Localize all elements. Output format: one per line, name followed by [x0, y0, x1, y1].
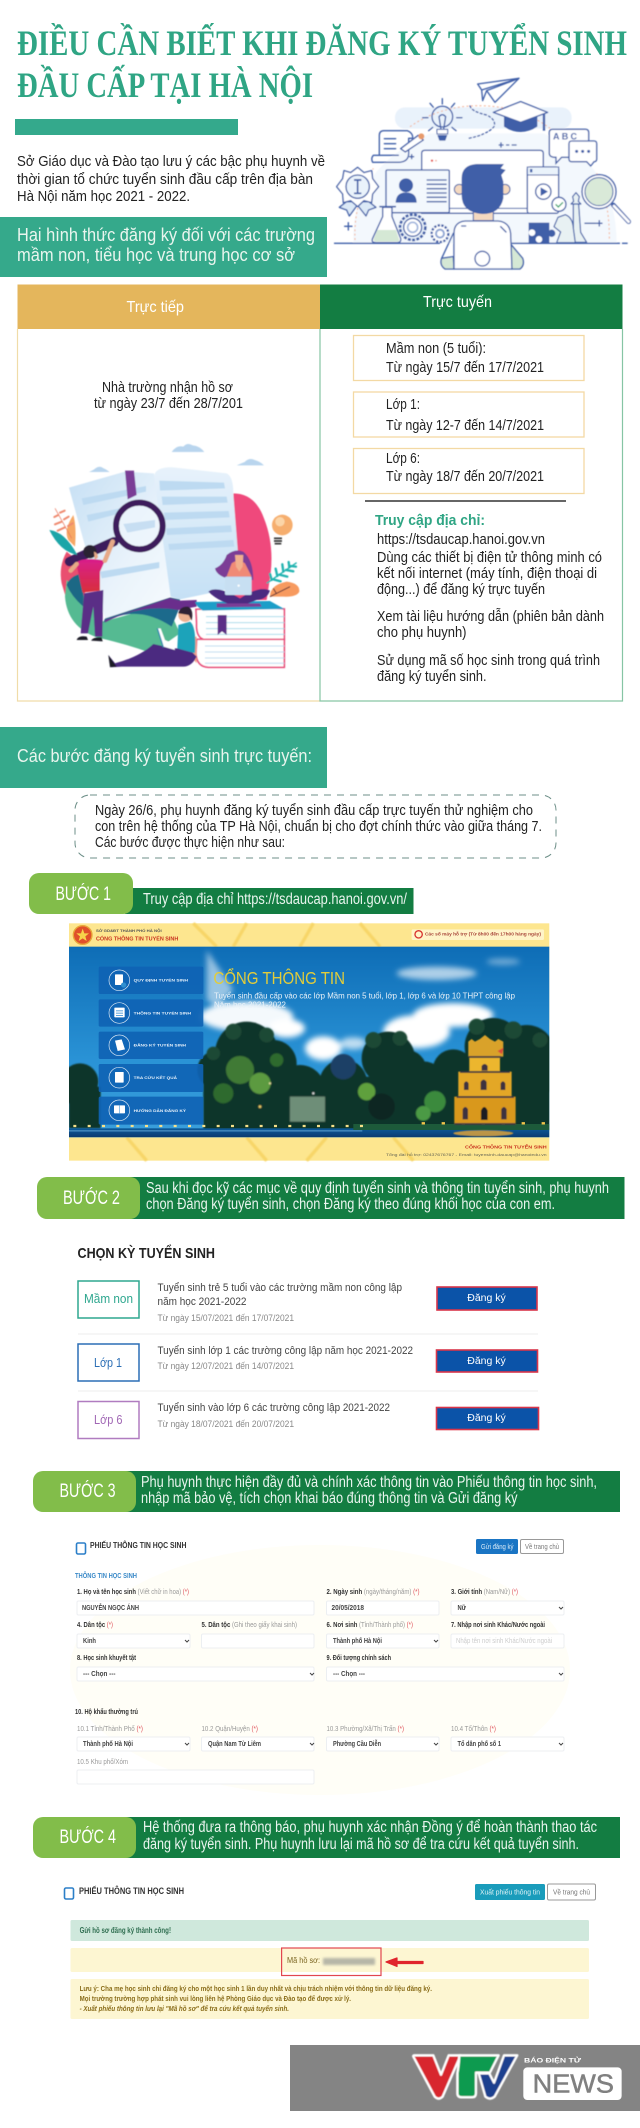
file code alert: Mã hồ sơ: — [287, 1955, 320, 1965]
panel: two registration forms heading: Hai hình thức đăng ký đối với các trường — [17, 225, 315, 245]
form header — [75, 1539, 564, 1580]
page header — [64, 1884, 596, 1900]
row: grade 6 — [78, 1402, 538, 1438]
date box: grade 6: Từ ngày 18/7 đến 20/7/2021 — [386, 469, 544, 485]
row: preschool: Đăng ký — [467, 1292, 507, 1304]
form header: THÔNG TIN HỌC SINH — [75, 1571, 137, 1580]
panel: in-person registration column — [18, 284, 320, 701]
page header: Xuất phiếu thông tin — [480, 1888, 540, 1896]
icon: VTV mark — [413, 2055, 517, 2099]
row: preschool: Mầm non — [84, 1291, 133, 1306]
access instructions — [375, 512, 604, 685]
panel: online registration column — [320, 284, 622, 701]
step 3 banner: BƯỚC 3 — [60, 1480, 116, 1502]
panel: in-person registration column: Nhà trường nhận hồ sơ — [102, 380, 233, 396]
row: preschool: Từ ngày 15/07/2021 đến 17/07/2021 — [158, 1313, 294, 1324]
form values: Kinh — [83, 1636, 96, 1645]
panel: in-person registration column: Trực tiếp — [126, 299, 184, 316]
date box: grade 1: Từ ngày 12-7 đến 14/7/2021 — [386, 418, 544, 434]
portal heading — [213, 968, 515, 1009]
step 1 banner — [29, 873, 414, 914]
row: preschool: Tuyển sinh trẻ 5 tuổi vào các trường mầm non công lập — [158, 1282, 402, 1294]
intro text: thời gian tổ chức tuyển sinh đầu cấp trên địa bàn — [17, 172, 313, 188]
intro text: Hà Nội năm học 2021 - 2022. — [17, 189, 190, 205]
row: grade 1: Đăng ký — [467, 1355, 507, 1367]
form labels: 9. Đối tượng chính sách — [326, 1653, 391, 1662]
form values: NGUYỄN NGỌC ÁNH — [82, 1603, 139, 1612]
portal footer — [386, 1142, 547, 1157]
step 2 banner: chọn Đăng ký tuyển sinh, chọn Đăng ký theo đúng khối học của con em. — [146, 1196, 555, 1213]
form labels: 10. Hộ khẩu thường trú — [75, 1707, 138, 1716]
success alert — [70, 1920, 589, 1941]
step 1 banner: Truy cập địa chỉ https://tsdaucap.hanoi.gov.vn/ — [143, 891, 407, 908]
panel: in-person registration column: từ ngày 23/7 đến 28/7/201 — [94, 396, 243, 412]
note alert: - Xuất phiếu thông tin lưu lại "Mã hồ sơ" để tra cứu kết quả tuyển sinh. — [80, 2004, 289, 2013]
form labels — [75, 1587, 545, 1766]
arrow — [386, 1958, 423, 1966]
portal heading: Năm học 2021-2022 — [214, 999, 286, 1009]
row: grade 6: Đăng ký — [467, 1412, 507, 1424]
row: grade 6: Lớp 6 — [94, 1412, 122, 1427]
note alert: Lưu ý: Cha mẹ học sinh chỉ đăng ký cho một học sinh 1 lần duy nhất và chịu trách nhiệm với thông tin dữ liệu đăng ký. — [80, 1984, 432, 1993]
step 3 banner: nhập mã bảo vệ, tích chọn khai báo đúng thông tin và Gửi đăng ký — [141, 1490, 518, 1507]
form labels: 10.3 Phường/Xã/Thị Trấn (*) — [326, 1724, 404, 1733]
step 3 banner — [33, 1471, 620, 1512]
form labels: 6. Nơi sinh (Tỉnh/Thành phố) (*) — [326, 1620, 413, 1629]
row: preschool: năm học 2021-2022 — [158, 1296, 246, 1308]
access instructions: Xem tài liệu hướng dẫn (phiên bản dành — [377, 608, 604, 625]
form header: Gửi đăng ký — [481, 1542, 514, 1551]
panel: two registration forms heading: mầm non, tiểu học và trung học cơ sở — [17, 245, 295, 265]
access instructions: cho phụ huynh) — [377, 625, 466, 641]
step 1 banner: BƯỚC 1 — [56, 883, 111, 905]
form values: --- Chọn --- — [333, 1669, 365, 1678]
icon: education illustration with student at computer — [334, 78, 629, 269]
access instructions: Sử dụng mã số học sinh trong quá trình — [377, 653, 600, 669]
success alert: Gửi hồ sơ đăng ký thành công! — [80, 1926, 171, 1935]
date box: grade 6: Lớp 6: — [386, 451, 420, 467]
screenshot: student information form — [70, 1539, 570, 1795]
portal header: Các số máy hỗ trợ (Từ 8h00 đến 17h00 hàng ngày) — [425, 932, 542, 937]
logo: VTV News on grey band — [290, 2045, 640, 2111]
step 2 banner: BƯỚC 2 — [63, 1187, 120, 1209]
form header: Về trang chủ — [525, 1542, 559, 1551]
panel: online registration steps heading: Các bước đăng ký tuyển sinh trực tuyến: — [17, 745, 312, 766]
panel: online registration steps heading — [0, 727, 327, 788]
form values: Nhập tên nơi sinh Khác/Nước ngoài — [456, 1636, 552, 1645]
date box: grade 1: Lớp 1: — [386, 397, 420, 413]
portal footer: CỔNG THÔNG TIN TUYỂN SINH — [465, 1142, 547, 1150]
date box: preschool: Mầm non (5 tuổi): — [386, 341, 486, 357]
icon: education illustration with student at computer: ABC — [553, 131, 577, 141]
panel: two registration forms heading — [0, 217, 327, 277]
portal heading: Tuyển sinh đầu cấp vào các lớp Mầm non 5 tuổi, lớp 1, lớp 6 và lớp 10 THPT công lập — [214, 990, 515, 1000]
form labels: 10.4 Tổ/Thôn (*) — [451, 1724, 496, 1733]
title: ĐẦU CẤP TẠI HÀ NỘI — [17, 65, 313, 105]
form values: Thành phố Hà Nội — [83, 1739, 133, 1748]
menu buttons — [99, 967, 203, 1125]
menu buttons: QUY ĐỊNH TUYỂN SINH — [134, 978, 188, 983]
form labels: 10.5 Khu phố/Xóm — [77, 1757, 128, 1766]
form labels: 10.1 Tỉnh/Thành Phố (*) — [77, 1724, 143, 1733]
menu buttons: TRA CỨU KẾT QUẢ — [134, 1075, 177, 1080]
step 4 banner — [33, 1817, 620, 1858]
form labels: 3. Giới tính (Nam/Nữ) (*) — [451, 1587, 518, 1596]
access instructions: đăng ký tuyển sinh. — [377, 669, 486, 685]
icon: books, magnifier and readers illustration — [49, 444, 299, 667]
row: grade 6: Tuyển sinh vào lớp 6 các trường công lập 2021-2022 — [158, 1402, 390, 1414]
file code alert — [70, 1948, 589, 1976]
access instructions: https://tsdaucap.hanoi.gov.vn — [377, 532, 545, 548]
form values: Nữ — [458, 1603, 467, 1612]
date box: grade 1 — [354, 392, 584, 437]
screenshot: registration success page — [64, 1884, 596, 2019]
logo: VTV News on grey band: BÁO ĐIỆN TỬ — [524, 2055, 582, 2064]
form inputs — [77, 1601, 564, 1784]
form values: Quận Nam Từ Liêm — [208, 1739, 261, 1748]
form values: Phường Cầu Diễn — [333, 1739, 381, 1748]
row: preschool — [78, 1281, 537, 1324]
date box: grade 6 — [354, 448, 584, 494]
menu buttons: THÔNG TIN TUYỂN SINH — [134, 1010, 191, 1015]
form labels: 7. Nhập nơi sinh Khác/Nước ngoài — [451, 1620, 545, 1629]
title accent bar — [15, 119, 238, 135]
form values: Tổ dân phố số 1 — [458, 1739, 501, 1748]
access instructions: động...) để đăng ký trực tuyến — [377, 582, 545, 598]
row: grade 1: Lớp 1 — [94, 1355, 122, 1370]
portal header: SỞ GD&ĐT THÀNH PHỐ HÀ NỘI — [96, 928, 162, 933]
row: grade 1: Tuyển sinh lớp 1 các trường công lập năm học 2021-2022 — [158, 1345, 413, 1357]
date box: preschool — [354, 336, 584, 380]
intro text: Sở Giáo dục và Đào tạo lưu ý các bậc phụ huynh về — [17, 154, 325, 170]
form values: --- Chọn --- — [83, 1669, 116, 1678]
callout: dashed intro box — [75, 795, 556, 858]
form values — [82, 1603, 563, 1748]
screenshot: admissions portal homepage — [60, 923, 563, 1161]
form values: Thành phố Hà Nội — [333, 1636, 382, 1645]
form header: PHIẾU THÔNG TIN HỌC SINH — [90, 1539, 186, 1550]
access instructions: kết nối internet (máy tính, điện thoại di — [377, 566, 597, 582]
step 4 banner: BƯỚC 4 — [60, 1826, 116, 1848]
form labels: 10.2 Quận/Huyện (*) — [202, 1724, 258, 1733]
page header: PHIẾU THÔNG TIN HỌC SINH — [79, 1885, 184, 1896]
form labels: 1. Họ và tên học sinh (Viết chữ in hoa) (*) — [77, 1587, 189, 1596]
note alert: Mọi trường trường hợp phát sinh vui lòng liên hệ Phòng Giáo dục và Đào tạo để được xử lý. — [80, 1994, 351, 2003]
callout: dashed intro box: Ngày 26/6, phụ huynh đăng ký tuyển sinh đầu cấp trực tuyến thử nghiệm cho — [95, 803, 533, 819]
callout: dashed intro box: Các bước được thực hiện như sau: — [95, 835, 285, 851]
access instructions: Dùng các thiết bị điện tử thông minh có — [377, 550, 602, 566]
menu buttons: HƯỚNG DẪN ĐĂNG KÝ — [134, 1108, 186, 1113]
row: grade 1: Từ ngày 12/07/2021 đến 14/07/2021 — [158, 1361, 294, 1372]
portal footer: Tổng đài hỗ trợ: 02437676767 - Email: tuyensinh-daucap@hanoiedu.vn — [386, 1152, 547, 1157]
step 2 banner — [37, 1177, 624, 1219]
intro text — [17, 154, 325, 205]
portal header — [73, 926, 544, 944]
portal header: CỔNG THÔNG TIN TUYỂN SINH — [96, 935, 178, 943]
callout: dashed intro box: con trên hệ thống của TP Hà Nội, chuẩn bị cho đợt chính thức vào giữa tháng 7. — [95, 819, 542, 835]
title — [17, 23, 627, 105]
portal heading: CỔNG THÔNG TIN — [213, 968, 345, 988]
form labels: 8. Học sinh khuyết tật — [77, 1653, 136, 1662]
screenshot: choose admission period: CHỌN KỲ TUYỂN SINH — [78, 1244, 215, 1262]
panel: online registration column: Trực tuyến — [423, 294, 492, 311]
form labels: 2. Ngày sinh (ngày/tháng/năm) (*) — [326, 1587, 420, 1596]
form labels: 4. Dân tộc (*) — [77, 1620, 113, 1629]
page header: Về trang chủ — [553, 1888, 590, 1896]
form values: 20/05/2018 — [332, 1603, 364, 1612]
note alert — [70, 1979, 589, 2019]
logo: VTV News on grey band: NEWS — [533, 2069, 614, 2099]
access instructions: Truy cập địa chỉ: — [375, 512, 485, 529]
row: grade 6: Từ ngày 18/07/2021 đến 20/07/2021 — [158, 1419, 294, 1430]
date box: preschool: Từ ngày 15/7 đến 17/7/2021 — [386, 360, 544, 376]
row: grade 1 — [78, 1344, 538, 1381]
form labels: 5. Dân tộc (Ghi theo giấy khai sinh) — [202, 1620, 297, 1629]
menu buttons: ĐĂNG KÝ TUYỂN SINH — [134, 1043, 186, 1048]
screenshot: choose admission period — [78, 1244, 538, 1438]
